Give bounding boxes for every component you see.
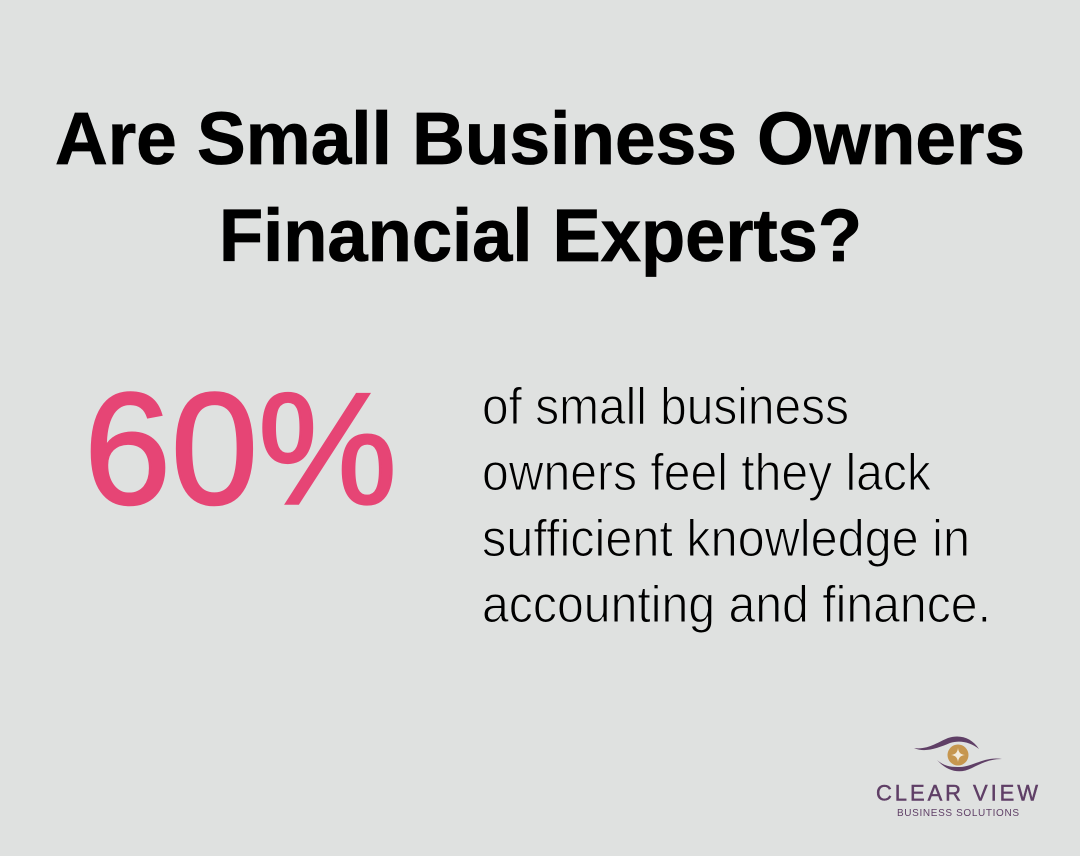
statistic description: owners feel they lack [482, 444, 932, 502]
statistic description [482, 378, 991, 634]
logo wordmark: CLEAR VIEW [876, 780, 1038, 806]
statistic description: sufficient knowledge in [482, 510, 970, 568]
icon: eye with star [914, 736, 1002, 771]
logo tagline: BUSINESS SOLUTIONS [897, 808, 1019, 819]
statistic: 60%: 60% [84, 360, 397, 538]
title: Financial Experts? [219, 194, 862, 277]
title [55, 97, 1025, 277]
statistic description: accounting and finance. [482, 576, 991, 634]
title: Are Small Business Owners [55, 97, 1025, 180]
statistic description: of small business [482, 378, 849, 436]
logo: Clear View Business Solutions [876, 736, 1038, 819]
